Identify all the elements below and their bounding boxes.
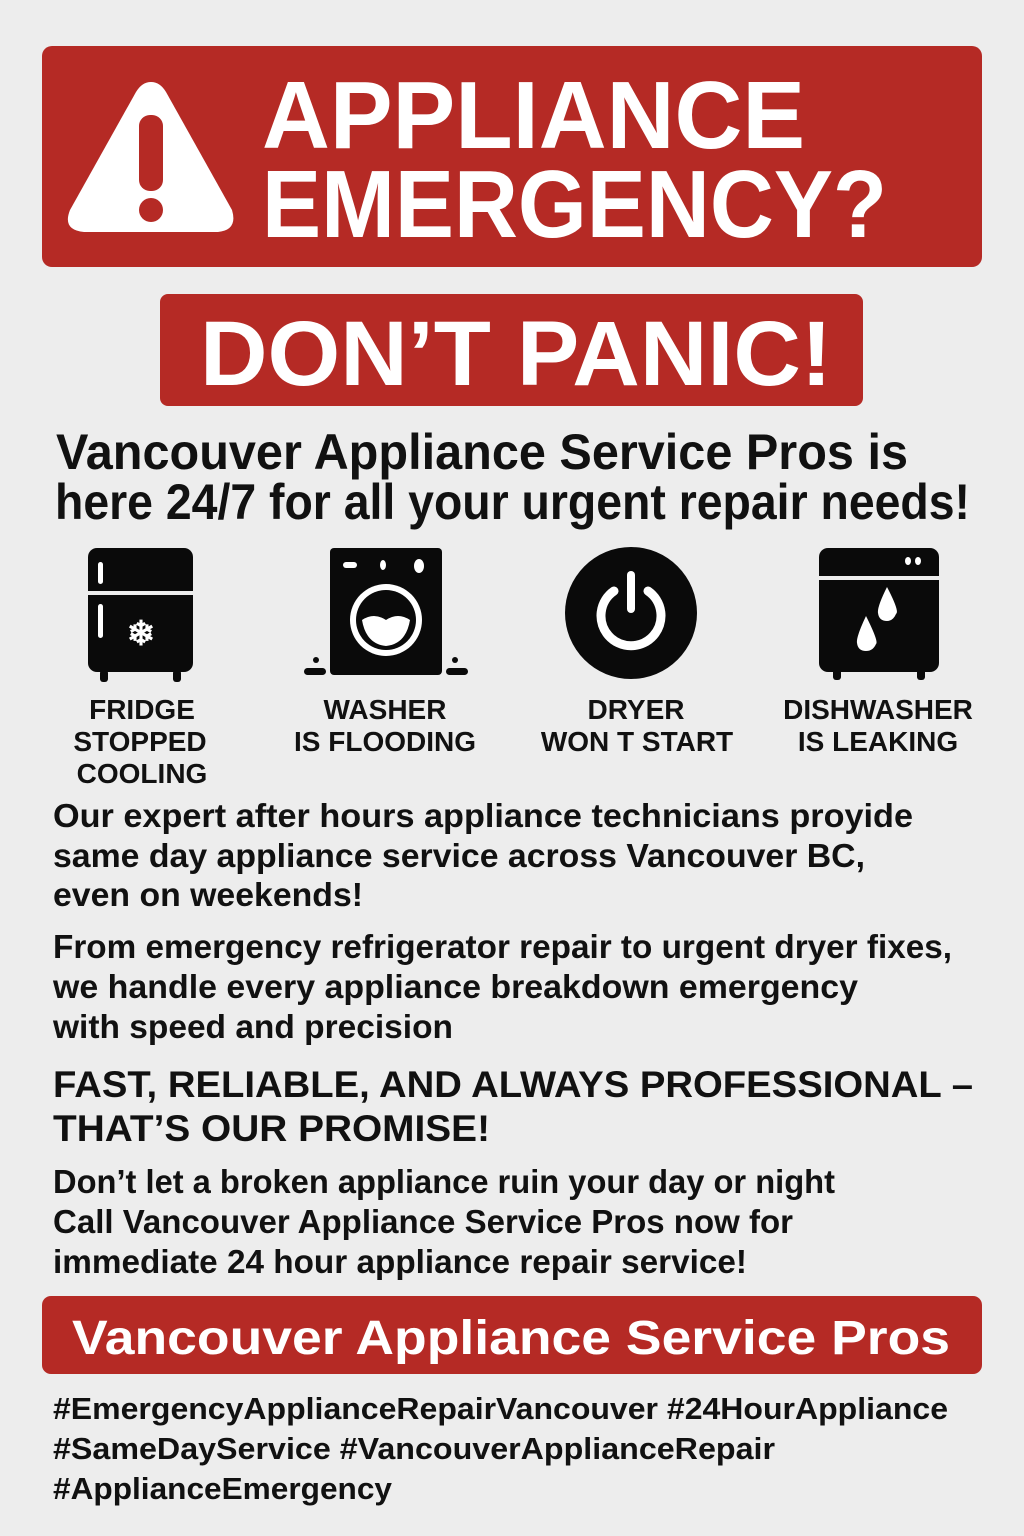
icon labels: STOPPED [73,726,207,757]
icon: fridge [88,548,193,682]
hashtags: #ApplianceEmergency [53,1471,393,1506]
paragraph: expert technicians: same day appliance service across Vancouver BC, [53,837,865,874]
paragraph: emergency repair: we handle every appliance breakdown emergency [52,968,859,1005]
icon labels [73,694,973,789]
promise heading: THAT’S OUR PROMISE! [53,1108,490,1149]
paragraph: expert technicians [53,797,913,913]
title text: APPLIANCE [262,62,805,169]
icon labels: DRYER [588,694,684,725]
title text [262,62,887,258]
paragraph: expert technicians: Our expert after hours appliance technicians proyide [53,797,913,834]
icon labels: FRIDGE [89,694,195,725]
paragraph: call now: Call Vancouver Appliance Service Pros now for [53,1203,793,1240]
paragraph: call now [53,1163,835,1280]
icon labels: DISHWASHER [783,694,973,725]
icon: dishwasher [819,548,939,680]
icon: warning triangle [68,82,233,232]
icon labels: WASHER [324,694,446,725]
title banner [42,46,982,267]
icon labels: COOLING [77,758,207,789]
promise heading [53,1064,973,1149]
icon labels: WON T START [541,726,733,757]
bottom banner: Vancouver Appliance Service Pros [72,1312,950,1365]
headline: Vancouver Appliance Service Pros is [56,424,908,480]
icon: washer [304,548,468,675]
icon: fridge: ❄ [127,615,155,653]
headline: here 24/7 for all your urgent repair needs! [55,474,970,530]
don't panic banner: DON’T PANIC! [200,303,832,405]
headline [55,424,970,530]
hashtags: #SameDayService #VancouverApplianceRepair [53,1431,775,1466]
paragraph: emergency repair: with speed and precision [52,1008,453,1045]
icon labels: IS FLOODING [294,726,476,757]
title text: EMERGENCY? [262,151,887,258]
promise heading: FAST, RELIABLE, AND ALWAYS PROFESSIONAL – [53,1064,973,1105]
paragraph: emergency repair [52,928,952,1045]
paragraph: call now: immediate 24 hour appliance repair service! [53,1243,747,1280]
hashtags: #EmergencyApplianceRepairVancouver #24HourAppliance [53,1391,948,1426]
paragraph: emergency repair: From emergency refrigerator repair to urgent dryer fixes, [53,928,952,965]
paragraph: call now: Don’t let a broken appliance ruin your day or night [53,1163,835,1200]
icon labels: IS LEAKING [798,726,958,757]
paragraph: expert technicians: even on weekends! [53,876,363,913]
icon: dryer power [565,547,697,679]
bottom banner [42,1296,982,1374]
hashtags [53,1391,948,1506]
